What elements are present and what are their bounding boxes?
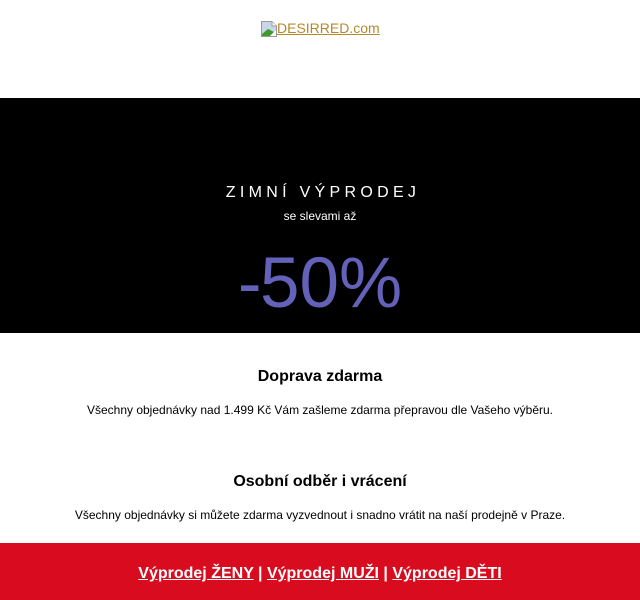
logo: broken image icon with DESIRRED.com link [261,20,380,37]
discount figure: -50% [238,244,402,323]
heading: free shipping: Doprava zdarma [258,368,382,385]
panel: black sale banner [0,98,640,333]
category links: Výprodej ŽENY | Výprodej MUŽI | Výprodej DĚTI [138,565,502,582]
text: free shipping details: Všechny objednávky nad 1.499 Kč Vám zašleme zdarma přepravou dle Vašeho výběru. [87,403,553,417]
heading: personal pickup: Osobní odběr i vrácení [233,473,407,490]
logo text: DESIRRED.com [277,20,380,36]
subheading: se slevami až [284,209,356,223]
heading: winter sale: ZIMNÍ VÝPRODEJ [226,184,420,201]
text: personal pickup details: Všechny objednávky si můžete zdarma vyzvednout i snadno vrátit na naší prodejně v Praze. [75,508,565,522]
panel: red footer links [0,543,640,600]
icon: broken image [261,21,277,37]
